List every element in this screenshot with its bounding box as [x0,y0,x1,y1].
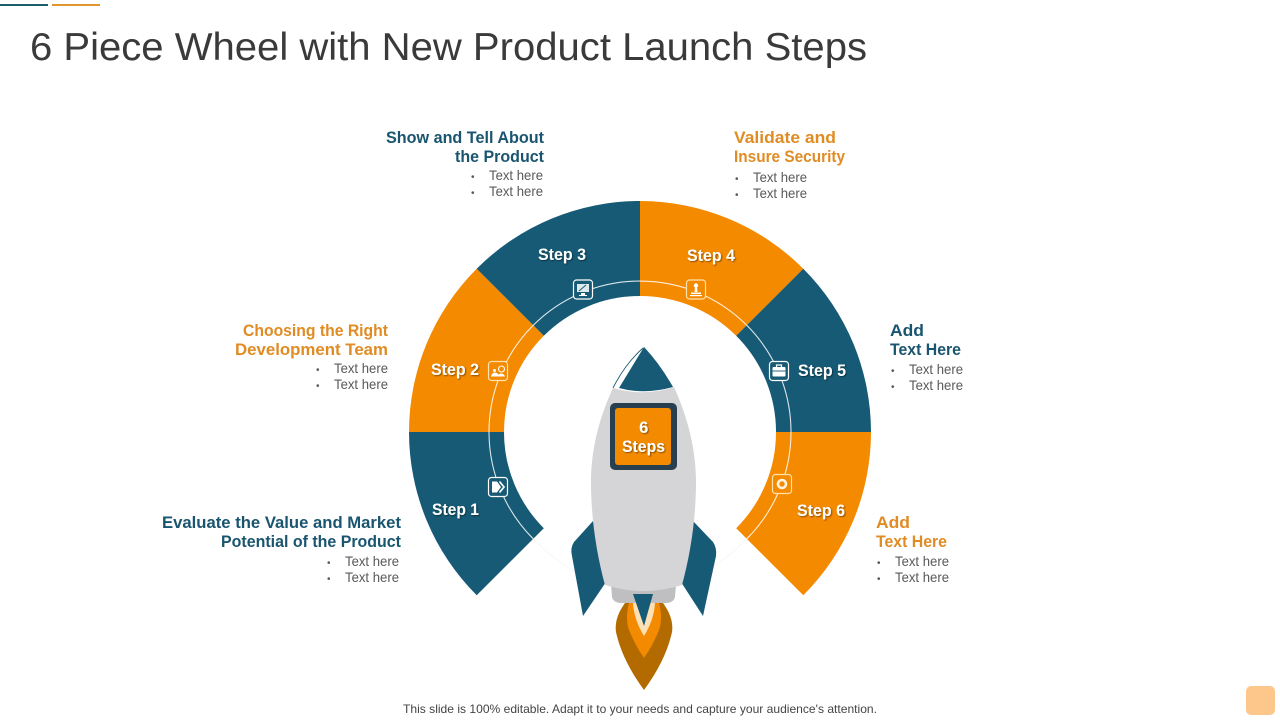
icon: step 3 monitor [574,280,592,299]
window text [622,419,665,456]
text block: step 5: Text Here [890,341,961,359]
text block: step 1: Evaluate the Value and Market [162,514,402,532]
center fin [633,594,653,626]
label: step 2: Step 2 [431,361,479,379]
left fin [571,521,606,616]
text block: step 6: Text Here [876,533,947,551]
label: step 5: Step 5 [798,362,846,380]
text block: step 3: Show and Tell About [386,129,544,147]
text block: step 2: Text here [334,376,388,392]
text block: step 2 [235,322,388,392]
text block: step 2: Development Team [235,341,388,359]
icon: step 1 arrows [488,478,508,496]
text block: step 4: • [735,174,739,185]
right fin [681,521,716,616]
icon: step 2 team [488,362,508,380]
decorative header accent bars [0,4,100,6]
text block: step 3: the Product [455,148,544,166]
text block: step 5: Text here [909,377,963,393]
text block: step 6: Add [876,514,910,532]
text block: step 6: • [877,558,881,569]
text block: step 6 [876,514,949,585]
text block: step 1: Text here [345,569,399,585]
text block: step 1: • [327,574,331,585]
window text: 6 [639,419,648,437]
faint ring continuation behind rocket [533,539,747,572]
text block: step 1 [162,514,402,585]
text block: step 3: Text here [489,183,543,199]
text block: step 6: Text here [895,569,949,585]
corner button [1246,686,1275,715]
text block: step 4: Text here [753,185,807,201]
segment: step 2 [409,269,544,432]
nose cone [613,347,673,391]
text block: step 4 [734,129,846,201]
label: step 4: Step 4 [687,247,736,265]
segment: step 4 [640,201,803,336]
label: step 1: Step 1 [432,501,479,519]
text block: step 5 [890,322,963,393]
text block: step 5: • [891,366,895,377]
text block: step 6: • [877,574,881,585]
text block: step 2: • [316,381,320,392]
text block: step 4: Text here [753,169,807,185]
flame inner [633,603,655,636]
icon: step 4 stamp [686,280,706,299]
text block: step 2: Choosing the Right [243,322,388,340]
text block: step 1: • [327,558,331,569]
flame middle [627,603,661,658]
segment: step 5 [736,269,871,432]
window text: Steps [622,438,665,456]
text block: step 2: • [316,365,320,376]
text block: step 4: Insure Security [734,148,846,166]
footer note: This slide is 100% editable. Adapt it to your needs and capture your audience's attention. [403,702,877,716]
text block: step 3: • [471,188,475,199]
flame outer [616,603,672,690]
rocket illustration [571,347,716,690]
rocket body [591,387,696,591]
title: 6 Piece Wheel with New Product Launch Steps [30,26,867,69]
text block: step 4: • [735,190,739,201]
thin inner ring [489,281,791,539]
engine base [611,584,676,603]
segment: step 6 [736,432,871,595]
window [610,403,677,470]
text block: step 2: Text here [334,360,388,376]
text block: step 5: Add [890,322,924,340]
wheel chart [409,201,871,595]
text block: step 3: • [471,172,475,183]
text block: step 4: Validate and [734,129,836,147]
text block: step 1: Potential of the Product [221,533,401,551]
segment: step 1 [409,432,544,595]
icon: step 6 ring [772,474,792,494]
text block: step 3 [386,129,544,199]
text block: step 5: Text here [909,361,963,377]
label: step 6: Step 6 [797,502,845,520]
text block: step 1: Text here [345,553,399,569]
text block: step 6: Text here [895,553,949,569]
icon: step 5 briefcase [770,362,788,380]
text block: step 5: • [891,382,895,393]
label: step 3: Step 3 [538,246,586,264]
segment: step 3 [477,201,640,336]
text block: step 3: Text here [489,167,543,183]
